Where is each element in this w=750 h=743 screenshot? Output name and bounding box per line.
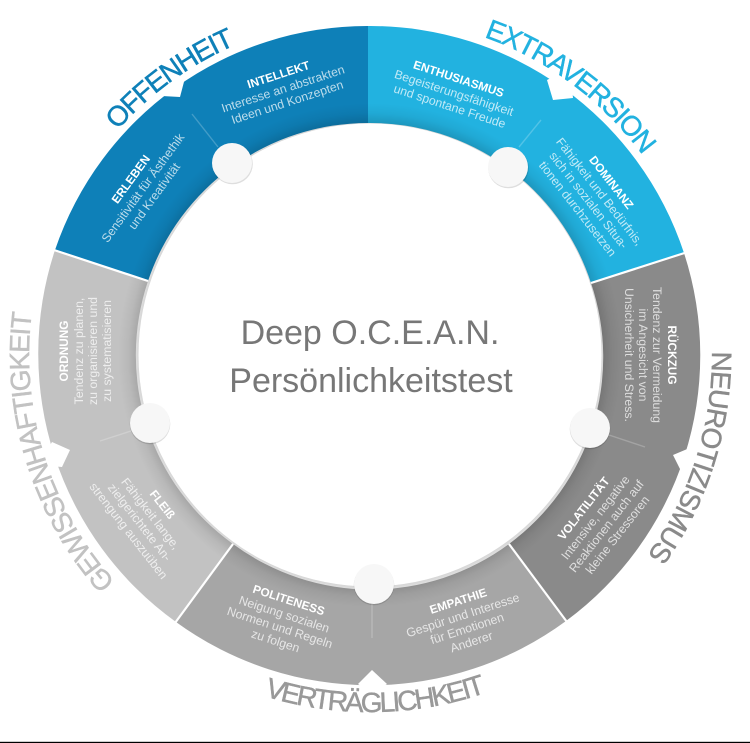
white segment dividers (54, 250, 684, 623)
text block: Intellekt: INTELLEKT (245, 58, 312, 91)
text block: Intellekt: Interesse an abstrakten (220, 62, 346, 116)
text block: Enthusiasmus: ENTHUSIASMUS (412, 57, 506, 100)
heading: Extraversion: EXTRAVERSION (486, 20, 657, 154)
heading: Gewissenhaftigkeit: GEWISSENHAFTIGKEIT (10, 311, 112, 590)
text block: Fleiß: Fähigkeit lange, (118, 475, 183, 552)
text block: Politeness (221, 576, 343, 665)
panel: Offenheit segment (55, 26, 368, 281)
heading: Offenheit: OFFENHEIT (108, 27, 230, 126)
text block: Ordnung (57, 297, 114, 405)
text block: Intellekt (215, 48, 351, 129)
panel: Neurotizismus segment (509, 253, 705, 621)
text block: Rückzug: Tendenz zur Vermeidung (650, 287, 664, 423)
inner ring shadow (118, 103, 622, 607)
text block: Dominanz (531, 126, 658, 265)
text block: Empathie: Gespür und Interesse (404, 590, 521, 640)
heading: Neurotizismus: NEUROTIZISMUS (650, 354, 732, 563)
text block: Politeness: POLITENESS (251, 582, 327, 618)
panel: Extraversion segment (368, 26, 684, 283)
faint sub-segment dividers (100, 114, 645, 638)
text block: Volatilität: kleine Stressoren (583, 493, 652, 577)
text block: Dominanz: sich in sozialen Situa- (546, 149, 631, 251)
text block: Rückzug: RÜCKZUG (665, 326, 679, 384)
text block: Volatilität (543, 459, 658, 584)
text block: Enthusiasmus: und spontane Freude (392, 82, 508, 131)
title: Deep O.C.E.A.N. (241, 314, 499, 352)
title: Persönlichkeitstest (229, 362, 513, 400)
text block: Enthusiasmus: Begeisterungsfähigkeit (393, 67, 516, 119)
text block: Volatilität: Reaktionen auch auf (566, 477, 647, 575)
text block: Dominanz: tionen durchzusetzen (536, 159, 619, 259)
heading: Verträglichkeit: VERTRÄGLICHKEIT (269, 674, 481, 713)
text block: Politeness: Neigung sozialen (237, 593, 331, 636)
text block: Dominanz: Fähigkeit und Bedürfnis, (553, 135, 646, 248)
text block: Empathie: Anderer (449, 629, 494, 655)
text block: Empathie: für Emotionen (429, 610, 506, 647)
text block: Dominanz: DOMINANZ (586, 153, 636, 212)
text block: Fleiß: FLEIß (147, 487, 178, 522)
text block: Erleben: Sensitivität für Ästhethik (99, 130, 188, 245)
text block: Rückzug: Unsicherheit und Stress. (622, 288, 636, 422)
text block: Ordnung: ORDNUNG (57, 321, 71, 381)
text block: Empathie: EMPATHIE (428, 585, 489, 617)
title (229, 314, 513, 400)
text block: Fleiß: zielgerichtete An- (105, 481, 174, 564)
panel: Verträglichkeit segment (176, 544, 566, 694)
junction circles (130, 143, 610, 605)
text block: Rückzug (622, 287, 679, 423)
text block: Erleben: ERLEBEN (109, 152, 153, 206)
text block: Rückzug: im Angesicht von (636, 309, 650, 402)
text block: Ordnung: zu organisieren und (86, 297, 100, 405)
text block: Fleiß: strengung auszuüben (87, 480, 170, 582)
text block: Politeness: Normen und Regeln (225, 604, 334, 651)
text block: Ordnung: Tendenz zu planen, (72, 298, 86, 404)
text block: Volatilität: VOLATILITÄT (555, 474, 613, 543)
text block: Intellekt: Ideen und Konzepten (230, 78, 345, 127)
text block: Volatilität: Intensive, negative (558, 473, 633, 562)
text block: Erleben (87, 121, 199, 253)
center disc (138, 124, 602, 586)
text block: Ordnung: zu systematisieren (100, 300, 114, 402)
bottom rule (0, 742, 750, 743)
text block: Politeness: zu folgen (250, 627, 302, 655)
text block: Fleiß (87, 454, 204, 582)
text block: Empathie (400, 576, 530, 667)
panel: Gewissenhaftigkeit segment (38, 250, 233, 622)
text block: Enthusiasmus (388, 53, 521, 132)
text block: Erleben: und Kreativität (126, 160, 183, 232)
